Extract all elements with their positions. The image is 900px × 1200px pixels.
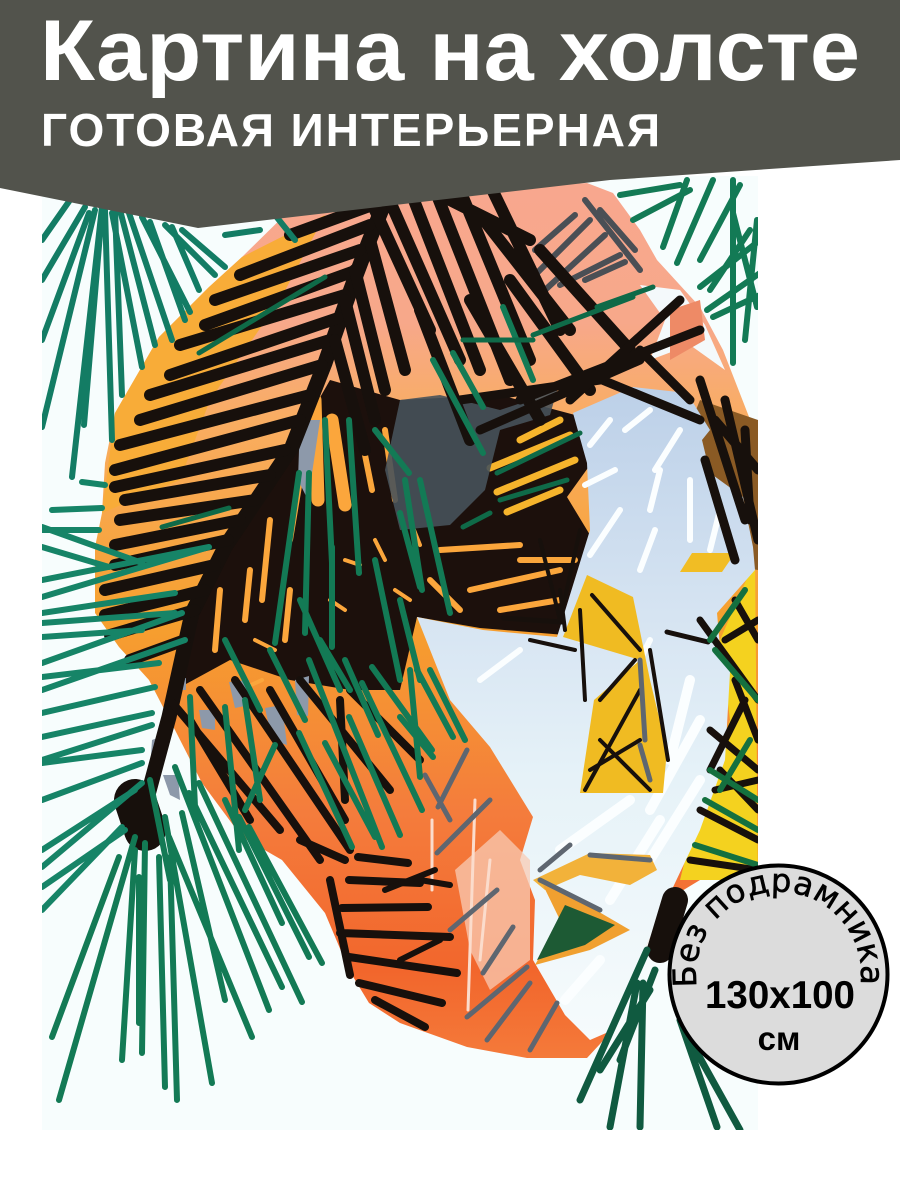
right cheek stripes <box>690 600 758 870</box>
black needles <box>105 185 758 1027</box>
grey speckled patches <box>385 380 560 530</box>
header banner <box>0 0 900 228</box>
pale face <box>417 387 755 1040</box>
lower left fan <box>52 697 322 1100</box>
badge: size <box>668 864 890 1086</box>
yellow right band <box>680 560 758 880</box>
white streaks on face <box>432 410 720 1010</box>
lower right fan <box>580 950 740 1130</box>
orange head silhouette <box>95 183 758 1058</box>
branch knob <box>135 800 145 830</box>
interior needles <box>225 307 533 847</box>
green in mouth <box>537 905 615 960</box>
dark hair mass <box>175 380 590 690</box>
badge unit: см <box>758 1020 800 1057</box>
right cheek green stripes <box>695 590 758 865</box>
grey streaks on lower face <box>425 660 650 1050</box>
yellow left hair highlight <box>102 215 325 513</box>
mouth shadow <box>535 885 630 965</box>
left fan <box>42 482 209 910</box>
badge arc text: Без подрамника <box>672 874 880 985</box>
painting: portrait behind pine branches <box>42 176 760 1130</box>
right fan <box>335 185 630 450</box>
top left fan <box>42 200 295 477</box>
pale patch on lower cheek <box>455 830 530 990</box>
yellow upper eye patch <box>680 553 735 572</box>
yellow eye socket <box>563 575 667 793</box>
lower cheek needles <box>300 840 457 1027</box>
dark right temple <box>696 400 758 570</box>
socket lines <box>530 530 668 790</box>
grey striped upper patch <box>530 200 640 290</box>
pale forehead streak <box>640 285 725 370</box>
orange slivers in hair mass <box>215 400 575 690</box>
eye lashes <box>560 621 710 644</box>
upper lip shadow <box>533 853 657 890</box>
green needles <box>42 180 760 1130</box>
subtitle: ГОТОВАЯ ИНТЕРЬЕРНАЯ <box>41 104 660 156</box>
left fan <box>105 195 400 660</box>
lower hair <box>170 680 420 860</box>
top right fan <box>620 180 760 363</box>
title: Картина на холсте <box>40 3 860 99</box>
grey drips <box>150 420 320 800</box>
dark cluster near badge <box>660 900 675 950</box>
yellow slivers right of hair <box>490 420 575 512</box>
flat needles on head <box>162 277 653 527</box>
main branch <box>142 190 390 817</box>
badge dimensions: 130x100 <box>705 974 855 1017</box>
coral forehead patch <box>670 300 705 360</box>
